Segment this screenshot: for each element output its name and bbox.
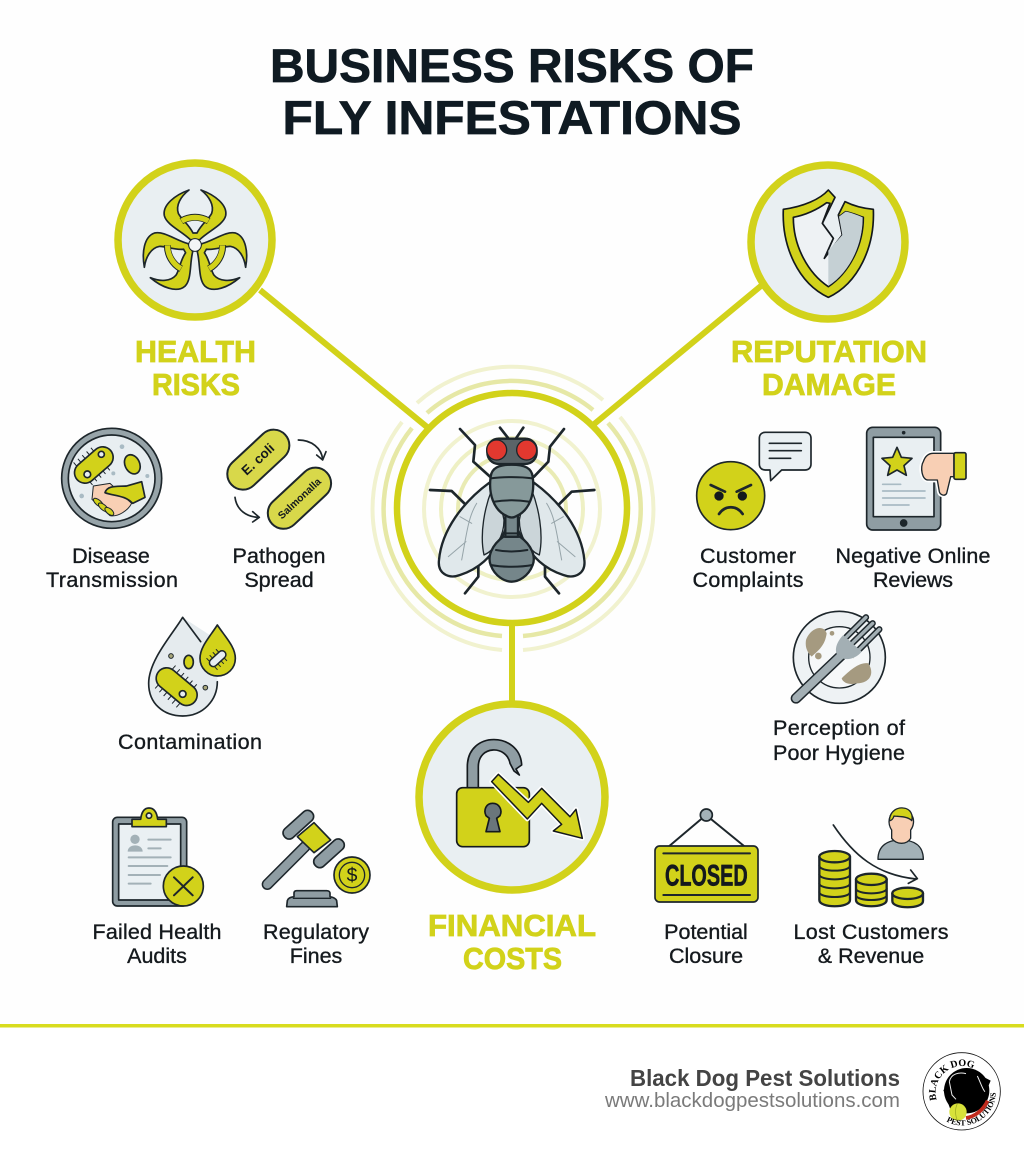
footer: company name and url	[604, 1065, 900, 1112]
icon: regulatory fines	[267, 808, 370, 907]
label: perception of poor hygiene: Poor Hygiene	[773, 741, 905, 765]
icon: regulatory fines: $	[347, 866, 358, 887]
label: pathogen spread: Pathogen	[232, 544, 326, 568]
icon: perception of poor hygiene	[793, 611, 885, 703]
panel: financial costs	[92, 704, 948, 976]
central fly circle	[397, 393, 627, 623]
icon: pathogen spread: E. coli	[239, 440, 277, 478]
label: regulatory fines: Fines	[290, 944, 342, 968]
label: negative online reviews	[836, 544, 990, 592]
label: disease transmission: Transmission	[46, 568, 178, 592]
heading: reputation damage: DAMAGE	[762, 367, 896, 402]
label: perception of poor hygiene: Perception of	[773, 716, 905, 740]
panel: reputation damage	[692, 165, 990, 765]
label: negative online reviews: Negative Online	[836, 544, 990, 568]
icon: fly	[430, 428, 594, 593]
icon: failed health audits	[113, 808, 203, 906]
heading: financial costs: COSTS	[463, 941, 562, 976]
label: failed health audits	[92, 920, 222, 968]
icon: pathogen spread	[221, 423, 338, 535]
heading: financial costs	[428, 908, 596, 976]
label: regulatory fines: Regulatory	[263, 920, 369, 944]
label: disease transmission: Disease	[72, 544, 150, 568]
logo: black dog pest solutions: BLACK DOG	[928, 1059, 974, 1101]
label: customer complaints: Customer	[700, 544, 796, 568]
label: lost customers and revenue: & Revenue	[818, 944, 924, 968]
icon: customer complaints	[697, 432, 811, 530]
heading: health risks: RISKS	[152, 367, 240, 402]
icon: lost customers and revenue	[819, 808, 923, 907]
label: failed health audits: Audits	[127, 944, 187, 968]
label: disease transmission	[46, 544, 178, 592]
panel: health risks	[46, 163, 338, 754]
icon: closed sign: CLOSED	[665, 859, 748, 892]
label: potential closure	[664, 920, 748, 968]
title	[270, 39, 754, 144]
heading: financial costs: FINANCIAL	[428, 908, 596, 943]
heading: health risks: HEALTH	[135, 334, 256, 369]
icon: contamination	[149, 617, 235, 716]
label: failed health audits: Failed Health	[92, 920, 222, 944]
label: potential closure: Closure	[669, 944, 743, 968]
label: lost customers and revenue	[794, 920, 948, 968]
label: regulatory fines	[263, 920, 369, 968]
label: pathogen spread	[232, 544, 326, 592]
label: potential closure: Potential	[664, 920, 748, 944]
title: FLY INFESTATIONS	[282, 91, 742, 144]
icon: broken lock with falling arrow	[419, 704, 605, 890]
label: contamination: Contamination	[118, 730, 262, 754]
icon: pathogen spread: Salmonalla	[276, 476, 324, 522]
logo: black dog pest solutions: PEST SOLUTIONS	[946, 1092, 996, 1126]
heading: health risks	[135, 334, 256, 402]
heading: reputation damage	[731, 334, 927, 402]
icon: negative online reviews	[867, 427, 966, 530]
heading: reputation damage: REPUTATION	[731, 334, 927, 369]
icon: closed sign	[655, 809, 758, 902]
label: negative online reviews: Reviews	[873, 568, 953, 592]
label: pathogen spread: Spread	[244, 568, 314, 592]
footer: company name and url: Black Dog Pest Solutions	[630, 1065, 900, 1091]
label: customer complaints: Complaints	[692, 568, 804, 592]
label: lost customers and revenue: Lost Customers	[794, 920, 948, 944]
logo: black dog pest solutions	[922, 1052, 1001, 1130]
icon: biohazard	[118, 163, 272, 317]
footer: company name and url: www.blackdogpestsolutions.com	[604, 1089, 900, 1112]
label: perception of poor hygiene	[773, 716, 905, 765]
label: customer complaints	[692, 544, 804, 592]
icon: cracked shield	[751, 165, 905, 319]
icon: disease transmission	[62, 428, 162, 528]
title: BUSINESS RISKS OF	[270, 39, 754, 92]
